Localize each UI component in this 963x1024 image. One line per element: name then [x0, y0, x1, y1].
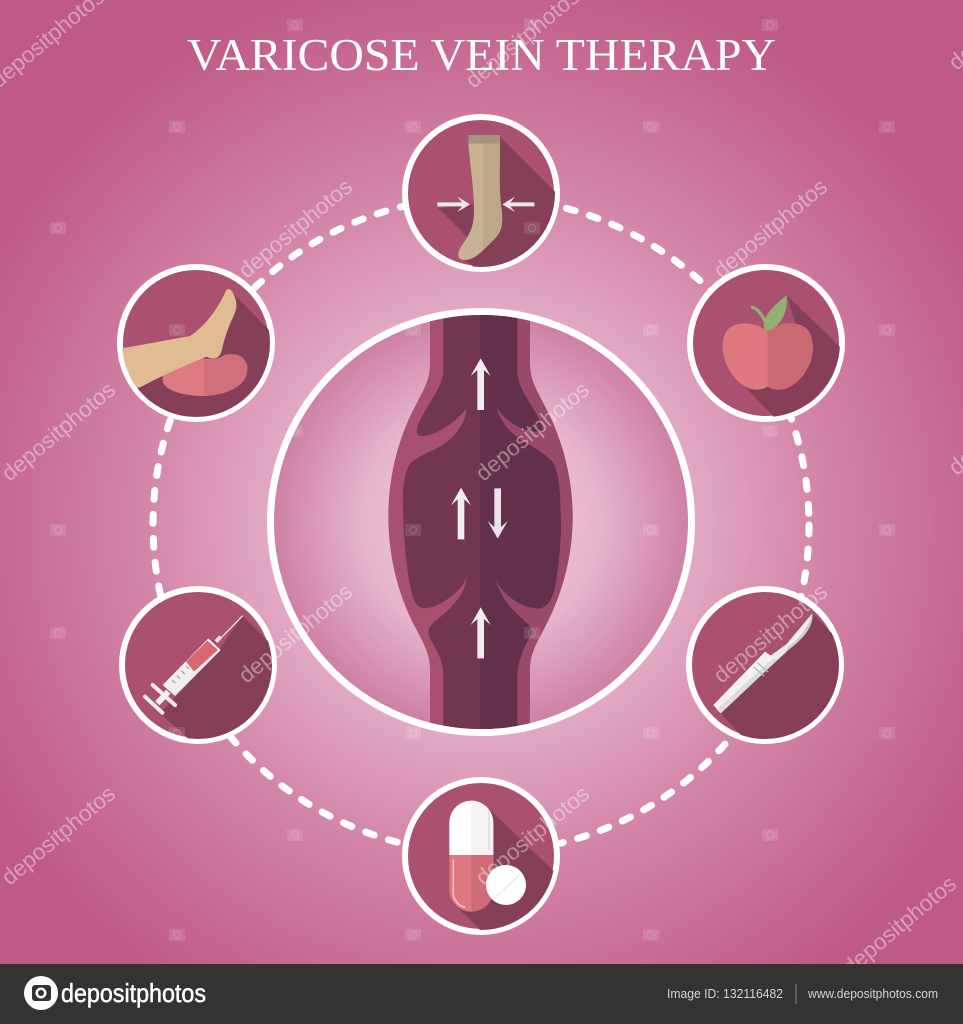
title: VARICOSE VEIN THERAPY [187, 30, 776, 80]
icon: pillow [163, 354, 247, 396]
watermarks: depositphotos [838, 871, 961, 980]
footer logo: depositphotos [61, 978, 206, 1008]
watermarks: depositphotos [709, 174, 832, 283]
watermarks: depositphotos [471, 377, 594, 486]
arrow: upward flow middle [451, 488, 471, 539]
panel: compression stocking [402, 114, 560, 272]
watermarks: depositphotos [471, 781, 594, 890]
panel: central vein diagram [270, 310, 692, 737]
arrow: upward flow bottom [471, 607, 491, 658]
icon: apple [723, 295, 813, 390]
footer logo [24, 976, 206, 1010]
arrow: compression left [437, 197, 470, 212]
panel: diet apple [690, 267, 847, 423]
vein cross-section [388, 310, 573, 737]
arrow: compression right [502, 197, 534, 212]
icon: scalpel [713, 613, 812, 713]
panel: foot elevation [117, 264, 275, 422]
image id: Image ID: 132116482 [667, 987, 783, 1001]
icon: capsule [449, 801, 493, 912]
panel: medication pills [405, 780, 570, 940]
panel: surgery scalpel [689, 589, 850, 747]
icon: leg and foot [117, 289, 236, 390]
arrow: upward flow top [471, 358, 491, 410]
watermarks: depositphotos [234, 174, 357, 283]
watermark camera marks [50, 19, 895, 941]
watermarks: depositphotos [234, 579, 357, 688]
footer bar [0, 964, 963, 1024]
dashed ring connecting therapies [153, 197, 809, 853]
site url: www.depositphotos.com [807, 987, 938, 1001]
icon: stocking [458, 135, 502, 260]
icon: syringe [145, 616, 243, 713]
icon: tablet [486, 865, 526, 905]
watermarks: depositphotos [0, 377, 120, 486]
arrow: reflux downward [488, 488, 508, 539]
watermarks: depositphotos [709, 579, 832, 688]
watermarks: depositphotos [0, 781, 120, 890]
panel: injection syringe [122, 589, 283, 750]
